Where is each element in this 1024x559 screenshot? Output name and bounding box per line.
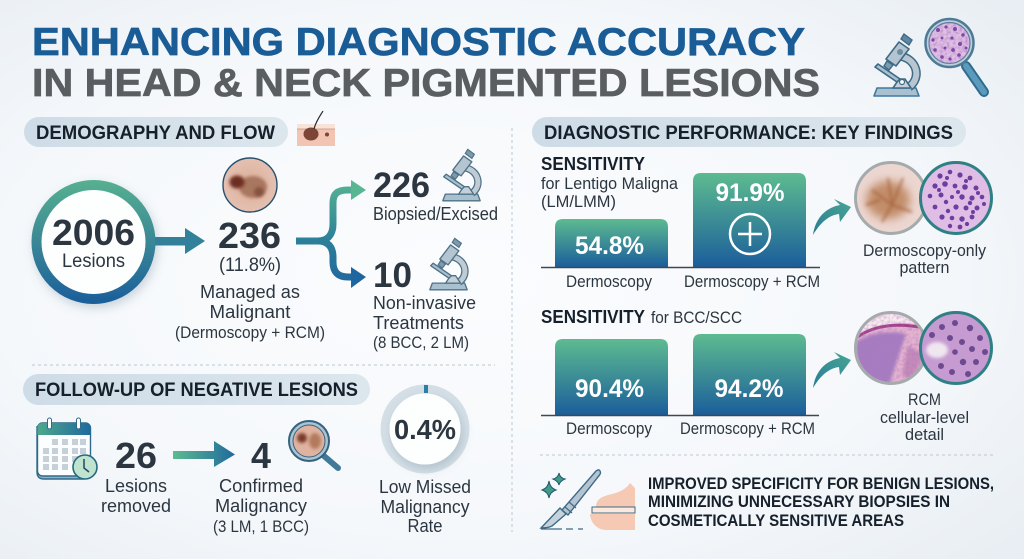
icon: microscope 226 <box>443 149 480 201</box>
caption: RCM cellular-level detail: detail <box>905 425 944 444</box>
bar chart: BCC/SCC sensitivity: Dermoscopy + RCM <box>680 419 815 438</box>
caption: dermoscopy-only pattern: pattern <box>900 258 950 277</box>
stat: 236 managed as malignant: (Dermoscopy + RCM) <box>175 323 325 342</box>
icon: sparkles <box>542 473 565 498</box>
stat: 10 non-invasive treatments: (8 BCC, 2 LM) <box>373 333 469 352</box>
title: IN HEAD & NECK PIGMENTED LESIONS <box>32 62 820 105</box>
stat: 2006 lesions circle <box>36 185 150 299</box>
icon: title magnifier with tissue <box>926 19 984 92</box>
arrow: branch up to biopsied <box>296 180 366 241</box>
stat: 236 managed as malignant: Malignant <box>210 302 290 322</box>
section heading: diagnostic performance <box>532 117 966 147</box>
bar chart: lentigo maligna sensitivity: Dermoscopy <box>566 272 652 291</box>
stat: 226 biopsied: 226 <box>373 166 430 205</box>
arrow: removed to confirmed <box>173 441 235 467</box>
arrow: lesions to managed <box>155 228 205 254</box>
bar chart: lentigo maligna sensitivity: Dermoscopy + RCM <box>684 272 820 291</box>
caption: dermoscopy-only pattern <box>863 241 986 277</box>
arrow: curved to dermoscopy pattern <box>813 199 851 235</box>
heading: sensitivity for lentigo maligna: (LM/LMM) <box>541 192 616 211</box>
photo: lesion <box>223 158 277 212</box>
chart: missed malignancy donut <box>385 385 465 469</box>
arrow: curved to RCM detail <box>813 352 851 388</box>
caption: dermoscopy-only pattern: Dermoscopy-only <box>863 241 986 260</box>
heading: sensitivity for lentigo maligna: SENSITIVITY <box>541 154 645 174</box>
caption: low missed malignancy rate: Malignancy <box>380 497 470 517</box>
bar: dermoscopy + RCM 91.9%: 91.9% <box>716 179 784 207</box>
bar: dermoscopy + RCM 94.2%: 94.2% <box>714 375 784 403</box>
stat: 236 managed as malignant: 236 <box>218 215 281 256</box>
icon: cream jar <box>590 483 635 530</box>
icon: scalpel <box>541 470 600 529</box>
stat: 4 confirmed malignancy: Malignancy <box>215 496 307 516</box>
title: ENHANCING DIAGNOSTIC ACCURACY <box>32 21 805 64</box>
stat: 26 lesions removed: 26 <box>115 435 157 476</box>
stat: 4 confirmed malignancy <box>213 435 309 536</box>
stat: 2006 lesions circle: 2006 <box>52 212 135 253</box>
image: dermoscopy pattern <box>856 162 926 234</box>
chart: missed malignancy donut: 0.4% <box>394 414 456 445</box>
icon: magnifier over lesion <box>289 421 338 468</box>
bar chart: lentigo maligna sensitivity <box>541 173 820 291</box>
icon: microscope 10 <box>430 238 467 290</box>
bar chart: BCC/SCC sensitivity <box>541 334 819 438</box>
caption: RCM cellular-level detail <box>880 390 969 444</box>
stat: 10 non-invasive treatments: Non-invasive <box>373 293 476 313</box>
stat: 10 non-invasive treatments: Treatments <box>373 313 464 333</box>
title <box>32 21 820 105</box>
icon: skin cross-section with lesion <box>297 111 335 146</box>
stat: 4 confirmed malignancy: Confirmed <box>219 476 303 496</box>
image: RCM cells pattern <box>920 162 992 234</box>
text: improved specificity: IMPROVED SPECIFICITY FOR BENIGN LESIONS, <box>648 475 994 493</box>
image: RCM cellular detail <box>920 312 992 384</box>
bar: dermoscopy 90.4%: 90.4% <box>575 375 644 403</box>
stat: 236 managed as malignant <box>175 215 325 342</box>
stat: 236 managed as malignant: Managed as <box>200 282 300 302</box>
section heading: follow-up: FOLLOW-UP OF NEGATIVE LESIONS <box>35 380 358 401</box>
bar: dermoscopy + RCM 94.2% <box>693 334 806 415</box>
caption: low missed malignancy rate: Low Missed <box>379 477 471 497</box>
section heading: demography and flow: DEMOGRAPHY AND FLOW <box>36 123 275 144</box>
heading: sensitivity for BCC/SCC: for BCC/SCC <box>651 308 742 327</box>
bar chart: BCC/SCC sensitivity: Dermoscopy <box>566 419 652 438</box>
caption: low missed malignancy rate <box>379 477 471 536</box>
stat: 10 non-invasive treatments: 10 <box>373 256 412 295</box>
stat: 2006 lesions circle: Lesions <box>62 251 125 272</box>
icon: calendar with clock <box>37 418 97 479</box>
stat: 10 non-invasive treatments <box>373 256 476 352</box>
stat: 26 lesions removed: removed <box>101 496 171 516</box>
heading: sensitivity for BCC/SCC <box>541 307 742 327</box>
stat: 4 confirmed malignancy: 4 <box>251 435 271 476</box>
stat: 4 confirmed malignancy: (3 LM, 1 BCC) <box>213 517 309 536</box>
section heading: follow-up <box>23 374 370 405</box>
section heading: diagnostic performance: DIAGNOSTIC PERFORMANCE: KEY FINDINGS <box>544 123 953 144</box>
heading: sensitivity for BCC/SCC: SENSITIVITY <box>541 307 645 327</box>
heading: sensitivity for lentigo maligna <box>541 154 679 211</box>
image: histology section <box>855 312 926 388</box>
heading: sensitivity for lentigo maligna: for Lentigo Maligna <box>541 174 679 193</box>
caption: RCM cellular-level detail: cellular-level <box>880 408 969 427</box>
icon: title microscope <box>874 34 919 96</box>
stat: 226 biopsied <box>373 166 498 224</box>
stat: 236 managed as malignant: (11.8%) <box>219 255 281 276</box>
bar: dermoscopy 90.4% <box>555 339 668 415</box>
section heading: demography and flow <box>24 117 288 147</box>
bar: dermoscopy 54.8%: 54.8% <box>575 232 644 260</box>
caption: RCM cellular-level detail: RCM <box>908 390 941 409</box>
caption: low missed malignancy rate: Rate <box>408 516 442 536</box>
text: improved specificity: MINIMIZING UNNECESSARY BIOPSIES IN <box>648 493 950 511</box>
stat: 26 lesions removed: Lesions <box>105 476 167 496</box>
bar: dermoscopy + RCM 91.9% <box>693 173 806 267</box>
text: improved specificity <box>648 475 994 530</box>
arrow: branch down to non-invasive <box>318 241 366 288</box>
bar: dermoscopy 54.8% <box>555 219 668 267</box>
stat: 226 biopsied: Biopsied/Excised <box>373 204 498 224</box>
text: improved specificity: COSMETICALLY SENSITIVE AREAS <box>648 512 904 530</box>
stat: 26 lesions removed <box>101 435 171 516</box>
